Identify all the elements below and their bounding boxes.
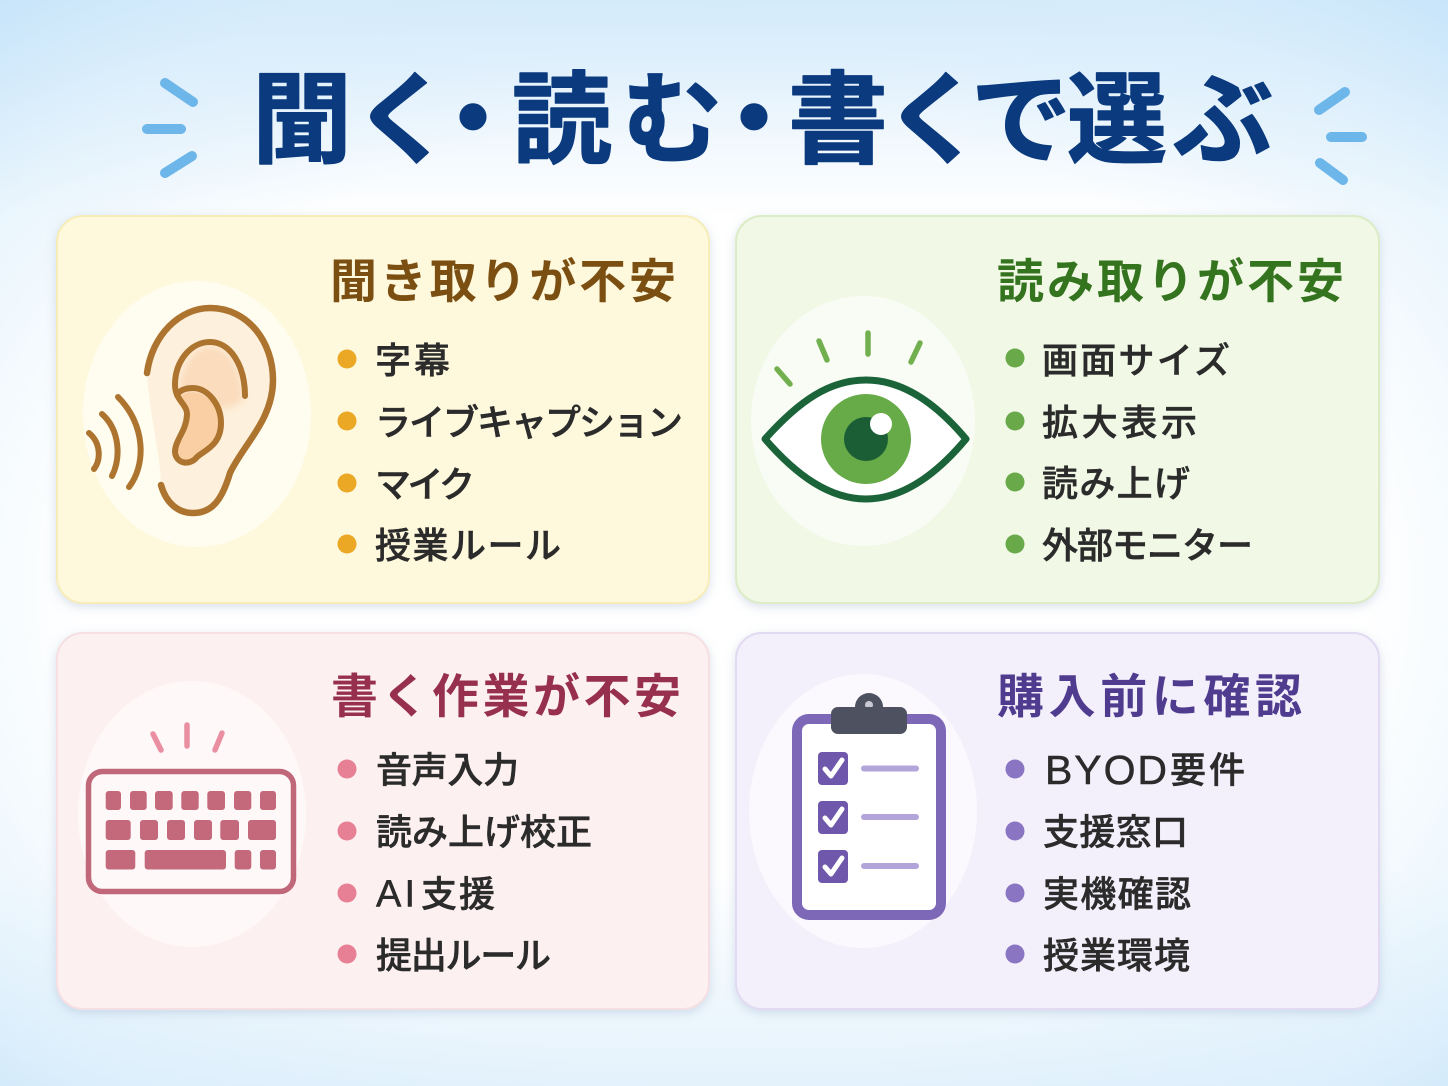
heading: 書く作業が不安 bbox=[331, 670, 681, 723]
list bbox=[1006, 340, 1253, 566]
panel: writing bbox=[57, 633, 709, 1009]
list: 要 bbox=[1170, 750, 1206, 790]
right sparkle accent bbox=[1319, 92, 1362, 180]
title: 書 bbox=[788, 65, 888, 177]
list: 外部モニター bbox=[1042, 525, 1253, 566]
list: 授業環境 bbox=[1043, 935, 1190, 976]
title: ・ bbox=[704, 65, 804, 177]
list bbox=[1006, 747, 1245, 976]
title: 選 bbox=[1067, 65, 1167, 177]
left sparkle accent bbox=[147, 83, 193, 173]
list: 件 bbox=[1209, 750, 1245, 790]
icon: keyboard bbox=[78, 681, 306, 947]
heading: 読み取りが不安 bbox=[997, 255, 1344, 308]
list bbox=[338, 750, 592, 976]
title: 聞 bbox=[252, 65, 352, 177]
title: 読 bbox=[512, 65, 612, 177]
list: 読み上げ校正 bbox=[376, 812, 592, 852]
list: ライブキャプション bbox=[375, 402, 683, 443]
list bbox=[338, 340, 683, 566]
list: 支援窓口 bbox=[1043, 812, 1188, 852]
icon: eye bbox=[751, 296, 975, 546]
title: ぶ bbox=[1173, 65, 1273, 177]
title: く bbox=[884, 65, 984, 177]
list: AI bbox=[376, 874, 415, 916]
title: む bbox=[622, 65, 722, 177]
list: マイク bbox=[375, 464, 475, 505]
title: で bbox=[971, 65, 1071, 177]
list: 支援 bbox=[421, 874, 495, 914]
list: 画面サイズ bbox=[1042, 340, 1230, 381]
list: 実機確認 bbox=[1043, 874, 1191, 914]
list: 授業ルール bbox=[375, 525, 561, 566]
title: く bbox=[353, 65, 453, 177]
title: ・ bbox=[423, 65, 523, 177]
panel: before purchase bbox=[736, 633, 1379, 1009]
list: 提出ルール bbox=[376, 935, 551, 976]
heading: 聞き取りが不安 bbox=[330, 255, 676, 308]
list: 読み上げ bbox=[1042, 463, 1190, 504]
list: BYOD bbox=[1045, 747, 1167, 793]
panel: listening bbox=[57, 216, 709, 603]
list: 音声入力 bbox=[376, 750, 519, 790]
panel: reading bbox=[736, 216, 1379, 603]
icon: ear bbox=[83, 281, 311, 547]
heading: 購入前に確認 bbox=[997, 670, 1302, 723]
list: 字幕 bbox=[375, 340, 450, 381]
list: 拡大表示 bbox=[1042, 402, 1197, 443]
icon: clipboard bbox=[749, 674, 977, 948]
